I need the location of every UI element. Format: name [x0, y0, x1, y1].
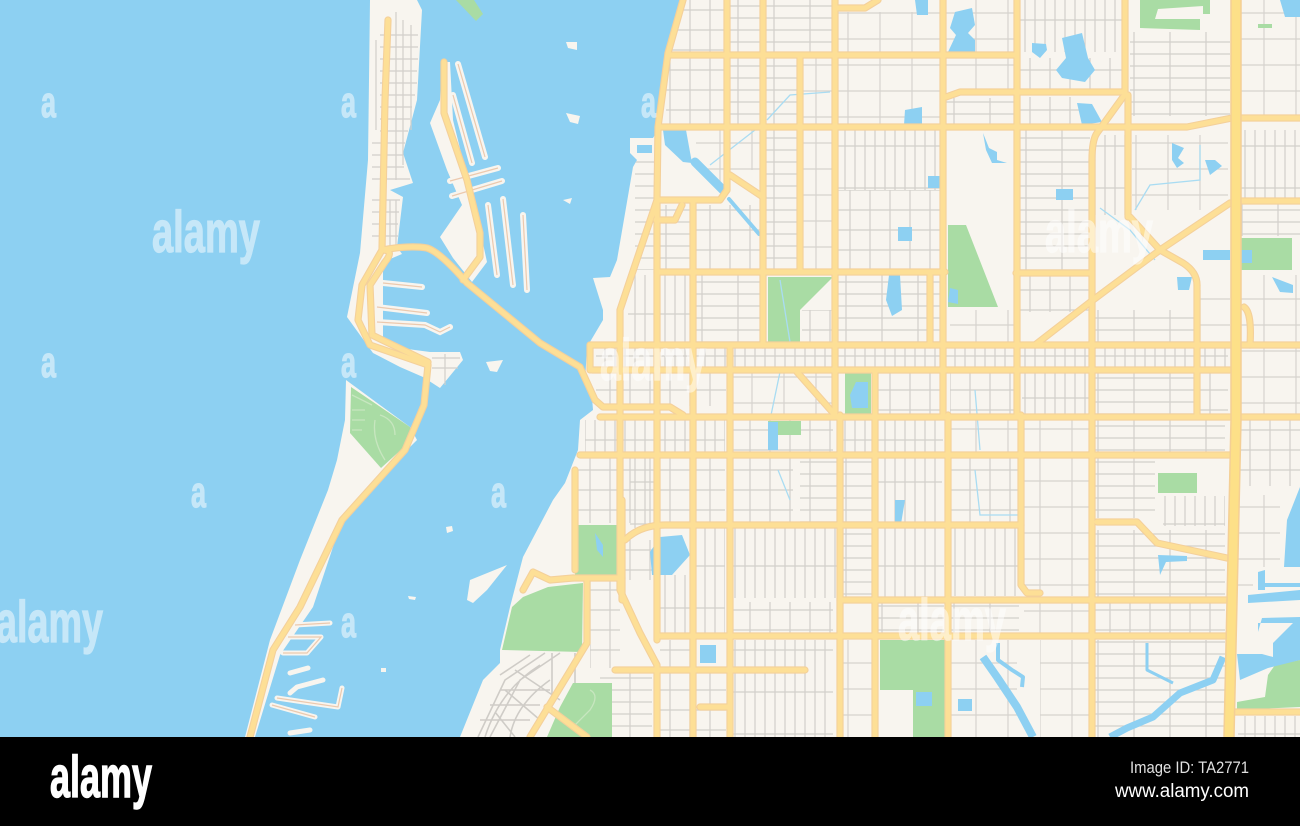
- land: marina island: [430, 62, 487, 282]
- highway: east arterial: [1229, 0, 1236, 737]
- park: north-east: [1140, 0, 1210, 30]
- canal: east bay: [1237, 617, 1300, 680]
- park: south-east: [1237, 660, 1300, 710]
- radial subdivision streets: [478, 653, 575, 737]
- lake: large south-west: [650, 535, 690, 575]
- parks: [350, 0, 1300, 737]
- canal: south east: [1110, 643, 1223, 737]
- watermark: small a marks: a: [41, 78, 56, 127]
- park: barrier island preserve: [350, 387, 414, 468]
- land: southern barrier island: [245, 380, 417, 737]
- lake cluster north: [904, 0, 1300, 175]
- park: Bay Vista: [768, 277, 833, 342]
- watermark: small a marks: a: [341, 78, 356, 127]
- watermark: small a marks: a: [191, 468, 206, 517]
- footer bar: [0, 737, 1300, 826]
- watermark: small a marks: a: [41, 338, 56, 387]
- footer: website: www.alamy.com: [1114, 781, 1249, 802]
- watermark: small a marks: [41, 78, 656, 647]
- lakes and canals: [595, 0, 1300, 737]
- land: barrier islands and mainland: [245, 0, 1300, 737]
- major roads: [250, 0, 1300, 737]
- park: lake block: [575, 525, 618, 575]
- watermark: map alamy downtown: alamy: [600, 328, 706, 393]
- land: western peninsula: [467, 565, 507, 603]
- park: square with pond: [845, 373, 871, 415]
- park: east strip: [1241, 238, 1292, 270]
- land: mainland: [460, 0, 1300, 737]
- park trails: [352, 395, 595, 725]
- watermark: small a marks: a: [491, 468, 506, 517]
- lake cluster central: [850, 133, 1293, 408]
- lakes south: [595, 422, 1300, 711]
- road fill: [250, 0, 1300, 737]
- pier basin: [637, 145, 652, 153]
- footer: alamy logo: alamy: [50, 745, 152, 810]
- marina street lines: [272, 64, 527, 717]
- footer: image ID: Image ID: TA2771: [1130, 758, 1249, 777]
- park: golf area: [880, 640, 945, 737]
- canal: south centre: [983, 643, 1033, 737]
- land: small islets: [381, 42, 580, 672]
- watermark: small a marks: a: [341, 338, 356, 387]
- watermark: map alamy east: alamy: [1045, 200, 1153, 265]
- canal: inlet channels: [695, 162, 759, 234]
- park: triangle: [948, 225, 998, 307]
- thin water channels: [710, 92, 1200, 515]
- land: northern barrier island: [347, 0, 463, 388]
- watermark: small a marks: a: [341, 598, 356, 647]
- canal: east docks: [1248, 570, 1300, 603]
- minor street grid: [578, 0, 1300, 737]
- watermark: left alamy: alamy: [0, 590, 103, 655]
- park: small square: [1258, 24, 1272, 28]
- land: southern marina fingers: [272, 623, 342, 733]
- lake: top left inlet: [663, 130, 692, 163]
- park: coastal preserve: [502, 583, 583, 652]
- land: marina finger piers: [377, 64, 527, 332]
- barrier island streets: [372, 12, 460, 385]
- park: rectangle: [1158, 473, 1197, 493]
- park: south-west: [547, 683, 612, 737]
- north islet park: [456, 0, 483, 21]
- watermark: central alamy: alamy: [152, 200, 260, 265]
- watermark: alamy text over map: [0, 78, 1153, 655]
- park: small strip: [768, 421, 801, 435]
- watermark: map alamy south: alamy: [898, 588, 1006, 653]
- watermark: small a marks: a: [641, 78, 656, 127]
- road casing: [250, 0, 1300, 737]
